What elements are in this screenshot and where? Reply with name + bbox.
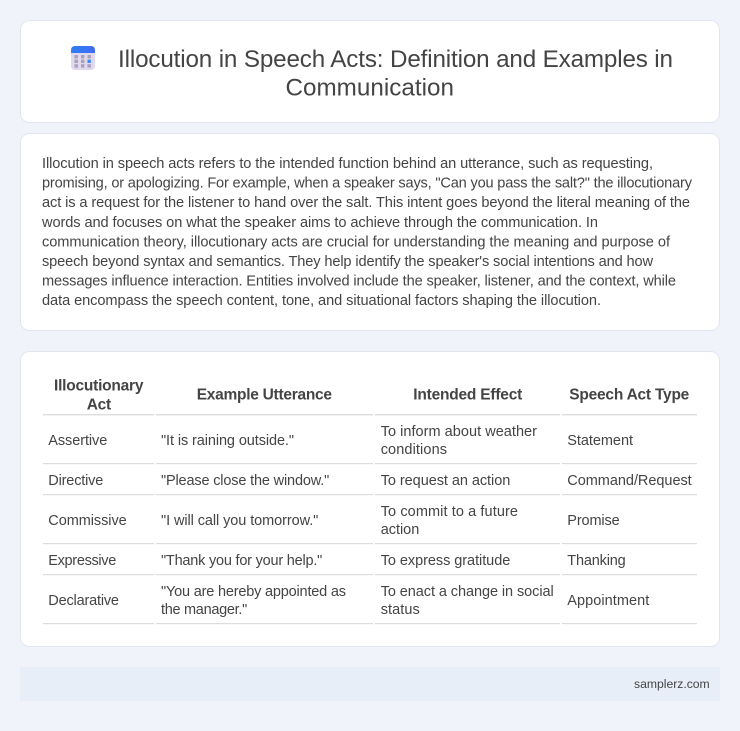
table row: commissive [48,504,620,538]
table row: commissive: "I will call you tomorrow." [161,513,318,529]
table header: Speech Act Type [569,386,690,403]
table row: declarative [48,584,649,618]
table row: expressive [48,553,626,569]
panel: table [20,352,720,646]
table row: commissive: action [381,522,419,538]
text block: definition: Illocution in speech acts refers to the intended function behind an utterance, such as requesting, [42,156,653,172]
title: Communication [286,74,454,102]
table header: Act [87,396,111,413]
table row: directive: To request an action [381,473,510,489]
text block: definition: messages influence interaction. Entities involved include the speaker, listener, and the context, while [42,274,676,290]
table row: declarative: Declarative [48,593,119,609]
text block: definition: words and focuses on what the speaker aims to achieve through the communication. In [41,215,598,231]
table row: assertive [48,424,633,458]
table row: expressive: Expressive [48,553,116,569]
table row: assertive: Assertive [48,433,107,449]
icon: calendar [71,46,95,70]
text block: definition: act is a request for the listener to hand over the salt. This intent goes beyond the literal meaning of the [42,195,690,211]
panel: header [20,20,720,122]
table row: directive: Directive [48,473,103,489]
title: Illocution in Speech Acts: Definition and Examples in [118,46,673,73]
table row: declarative: Appointment [567,593,649,609]
table row: directive: Command/Request [567,473,692,489]
footer [20,667,720,701]
table row: assertive: To inform about weather [381,424,537,440]
title [118,46,673,102]
table row: declarative: "You are hereby appointed as [161,584,346,600]
table header: Illocutionary [54,378,144,394]
panel: definition paragraph [20,134,720,330]
table row: assertive: "It is raining outside." [161,433,294,449]
table row: commissive: Commissive [48,513,127,529]
footer: samplerz.com [634,677,710,691]
table row: directive: "Please close the window." [161,473,329,489]
table row: expressive: "Thank you for your help." [161,553,322,569]
table row: assertive: Statement [567,433,633,449]
table row: directive [48,473,692,489]
table row: commissive: To commit to a future [381,504,518,520]
table row: declarative: the manager." [161,602,247,618]
table row: expressive: To express gratitude [381,553,510,569]
text block: definition [41,156,693,309]
text block: definition: communication theory, illocutionary acts are crucial for understanding the meaning and purpose of [42,234,671,250]
table row: commissive: Promise [567,513,620,529]
table row: declarative: status [381,602,420,618]
text block: definition: data encompass the speech content, tone, and situational factors shaping the illocution. [42,293,601,309]
table header [54,378,690,413]
table header: Example Utterance [197,386,332,403]
table row: expressive: Thanking [567,553,626,569]
table row: assertive: conditions [381,442,447,458]
text block: definition: promising, or apologizing. For example, when a speaker says, "Can you pass the salt?" the illocutionary [42,176,693,192]
text block: definition: speech beyond syntax and semantics. They help identify the speaker's social intentions and how [42,254,653,270]
table row: declarative: To enact a change in social [381,584,554,600]
table header: Intended Effect [413,386,522,403]
